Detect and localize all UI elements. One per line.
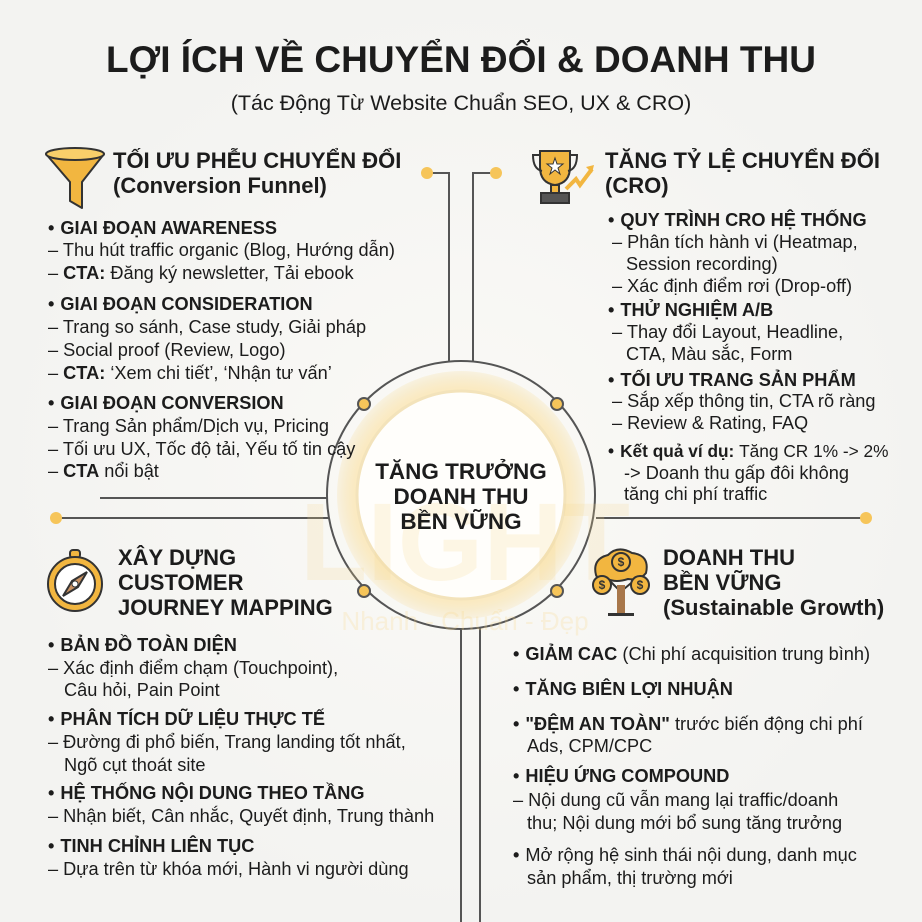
panel: customer journey: – Xác định điểm chạm (Touchpoint), xyxy=(48,658,338,678)
connector lines and central circle: LIGHT xyxy=(300,481,630,604)
subtitle: (Tác Động Từ Website Chuẩn SEO, UX & CRO) xyxy=(231,91,691,115)
panel: conversion funnel: – CTA: Đăng ký newsletter, Tải ebook xyxy=(48,263,354,283)
panel: CRO: Session recording) xyxy=(626,254,778,274)
list xyxy=(513,644,870,888)
icon: money tree: $ xyxy=(599,578,606,592)
panel: sustainable revenue: TĂNG BIÊN LỢI NHUẬN xyxy=(525,679,733,699)
heading: JOURNEY MAPPING xyxy=(118,595,333,620)
panel: customer journey: PHÂN TÍCH DỮ LIỆU THỰC TẾ xyxy=(60,709,325,729)
connector lines and central circle: Nhanh - Chuẩn - Đẹp xyxy=(341,606,589,636)
heading: (Sustainable Growth) xyxy=(663,595,884,620)
heading: BỀN VỮNG xyxy=(663,570,782,595)
icon: compass xyxy=(47,549,103,612)
list xyxy=(48,634,434,879)
panel: sustainable revenue: thu; Nội dung mới bổ sung tăng trưởng xyxy=(527,813,842,833)
panel: customer journey xyxy=(47,545,434,879)
panel: conversion funnel: GIAI ĐOẠN AWARENESS xyxy=(60,218,277,238)
heading xyxy=(113,148,401,198)
panel: CRO: – Sắp xếp thông tin, CTA rõ ràng xyxy=(612,391,876,411)
panel: CRO: CTA, Màu sắc, Form xyxy=(626,344,792,364)
panel: customer journey: Ngõ cụt thoát site xyxy=(64,755,206,775)
panel: customer journey: TINH CHỈNH LIÊN TỤC xyxy=(60,836,254,856)
icon: trophy xyxy=(532,150,594,204)
title: LỢI ÍCH VỀ CHUYỂN ĐỔI & DOANH THU xyxy=(106,39,816,80)
heading xyxy=(118,545,333,620)
icon: money tree: $ xyxy=(618,555,625,569)
list xyxy=(48,218,395,481)
heading xyxy=(605,148,880,198)
panel: sustainable revenue: HIỆU ỨNG COMPOUND xyxy=(525,766,729,786)
panel: CRO: TỐI ƯU TRANG SẢN PHẨM xyxy=(620,370,856,390)
heading: TĂNG TỶ LỆ CHUYỂN ĐỔI xyxy=(605,148,880,173)
panel: CRO: THỬ NGHIỆM A/B xyxy=(620,300,773,320)
icon: money tree: $ xyxy=(637,578,644,592)
panel: conversion funnel: – Trang so sánh, Case study, Giải pháp xyxy=(48,317,366,337)
panel: conversion funnel: – Tối ưu UX, Tốc độ tải, Yếu tố tin cậy xyxy=(48,439,355,459)
panel: sustainable revenue: Mở rộng hệ sinh thái nội dung, danh mục xyxy=(525,845,857,865)
center label xyxy=(375,458,547,534)
panel: conversion funnel: – Thu hút traffic organic (Blog, Hướng dẫn) xyxy=(48,240,395,260)
heading: CUSTOMER xyxy=(118,570,244,595)
panel: customer journey: – Đường đi phổ biến, Trang landing tốt nhất, xyxy=(48,732,406,752)
panel: sustainable revenue: – Nội dung cũ vẫn mang lại traffic/doanh xyxy=(513,790,838,810)
panel: CRO: -> Doanh thu gấp đôi không xyxy=(624,463,849,483)
panel: conversion funnel: – CTA: ‘Xem chi tiết’, ‘Nhận tư vấn’ xyxy=(48,363,332,383)
panel: CRO: – Thay đổi Layout, Headline, xyxy=(612,322,843,342)
panel: conversion funnel: – CTA nổi bật xyxy=(48,461,159,481)
icon: money tree xyxy=(592,548,650,616)
panel: customer journey: – Nhận biết, Cân nhắc, Quyết định, Trung thành xyxy=(48,806,434,826)
panel: CRO: Kết quả ví dụ: Tăng CR 1% -> 2% xyxy=(620,441,888,461)
panel: conversion funnel: GIAI ĐOẠN CONSIDERATION xyxy=(60,294,313,314)
panel: CRO xyxy=(532,148,888,504)
panel: customer journey: HỆ THỐNG NỘI DUNG THEO TẦNG xyxy=(60,783,365,803)
panel: conversion funnel: – Social proof (Review, Logo) xyxy=(48,340,286,360)
center label: TĂNG TRƯỞNG xyxy=(375,459,547,484)
heading xyxy=(663,545,884,620)
center label: BỀN VỮNG xyxy=(400,509,522,534)
panel: CRO: – Phân tích hành vi (Heatmap, xyxy=(612,232,858,252)
panel: conversion funnel: GIAI ĐOẠN CONVERSION xyxy=(60,393,284,413)
list xyxy=(608,209,888,504)
panel: customer journey: BẢN ĐỒ TOÀN DIỆN xyxy=(60,635,237,655)
panel: customer journey: – Dựa trên từ khóa mới, Hành vi người dùng xyxy=(48,859,409,879)
heading: DOANH THU xyxy=(663,545,795,570)
panel: customer journey: Câu hỏi, Pain Point xyxy=(64,680,220,700)
center label: DOANH THU xyxy=(394,484,528,509)
panel: conversion funnel xyxy=(45,147,401,481)
heading: TỐI ƯU PHỄU CHUYỂN ĐỔI xyxy=(113,148,401,173)
panel: CRO: – Review & Rating, FAQ xyxy=(612,413,808,433)
heading: (Conversion Funnel) xyxy=(113,173,327,198)
panel: conversion funnel: – Trang Sản phẩm/Dịch vụ, Pricing xyxy=(48,416,329,436)
icon: funnel xyxy=(45,147,105,209)
heading: (CRO) xyxy=(605,173,669,198)
heading: XÂY DỰNG xyxy=(118,545,236,570)
panel: CRO: – Xác định điểm rơi (Drop-off) xyxy=(612,276,852,296)
panel: sustainable revenue: sản phẩm, thị trường mới xyxy=(527,868,733,888)
panel: CRO: QUY TRÌNH CRO HỆ THỐNG xyxy=(620,210,867,230)
panel: CRO: tăng chi phí traffic xyxy=(624,484,767,504)
panel: sustainable revenue: "ĐỆM AN TOÀN" trước biến động chi phí xyxy=(525,714,863,734)
panel: sustainable revenue: Ads, CPM/CPC xyxy=(527,736,652,756)
panel: sustainable revenue xyxy=(513,545,884,888)
panel: sustainable revenue: GIẢM CAC (Chi phí acquisition trung bình) xyxy=(525,644,870,664)
